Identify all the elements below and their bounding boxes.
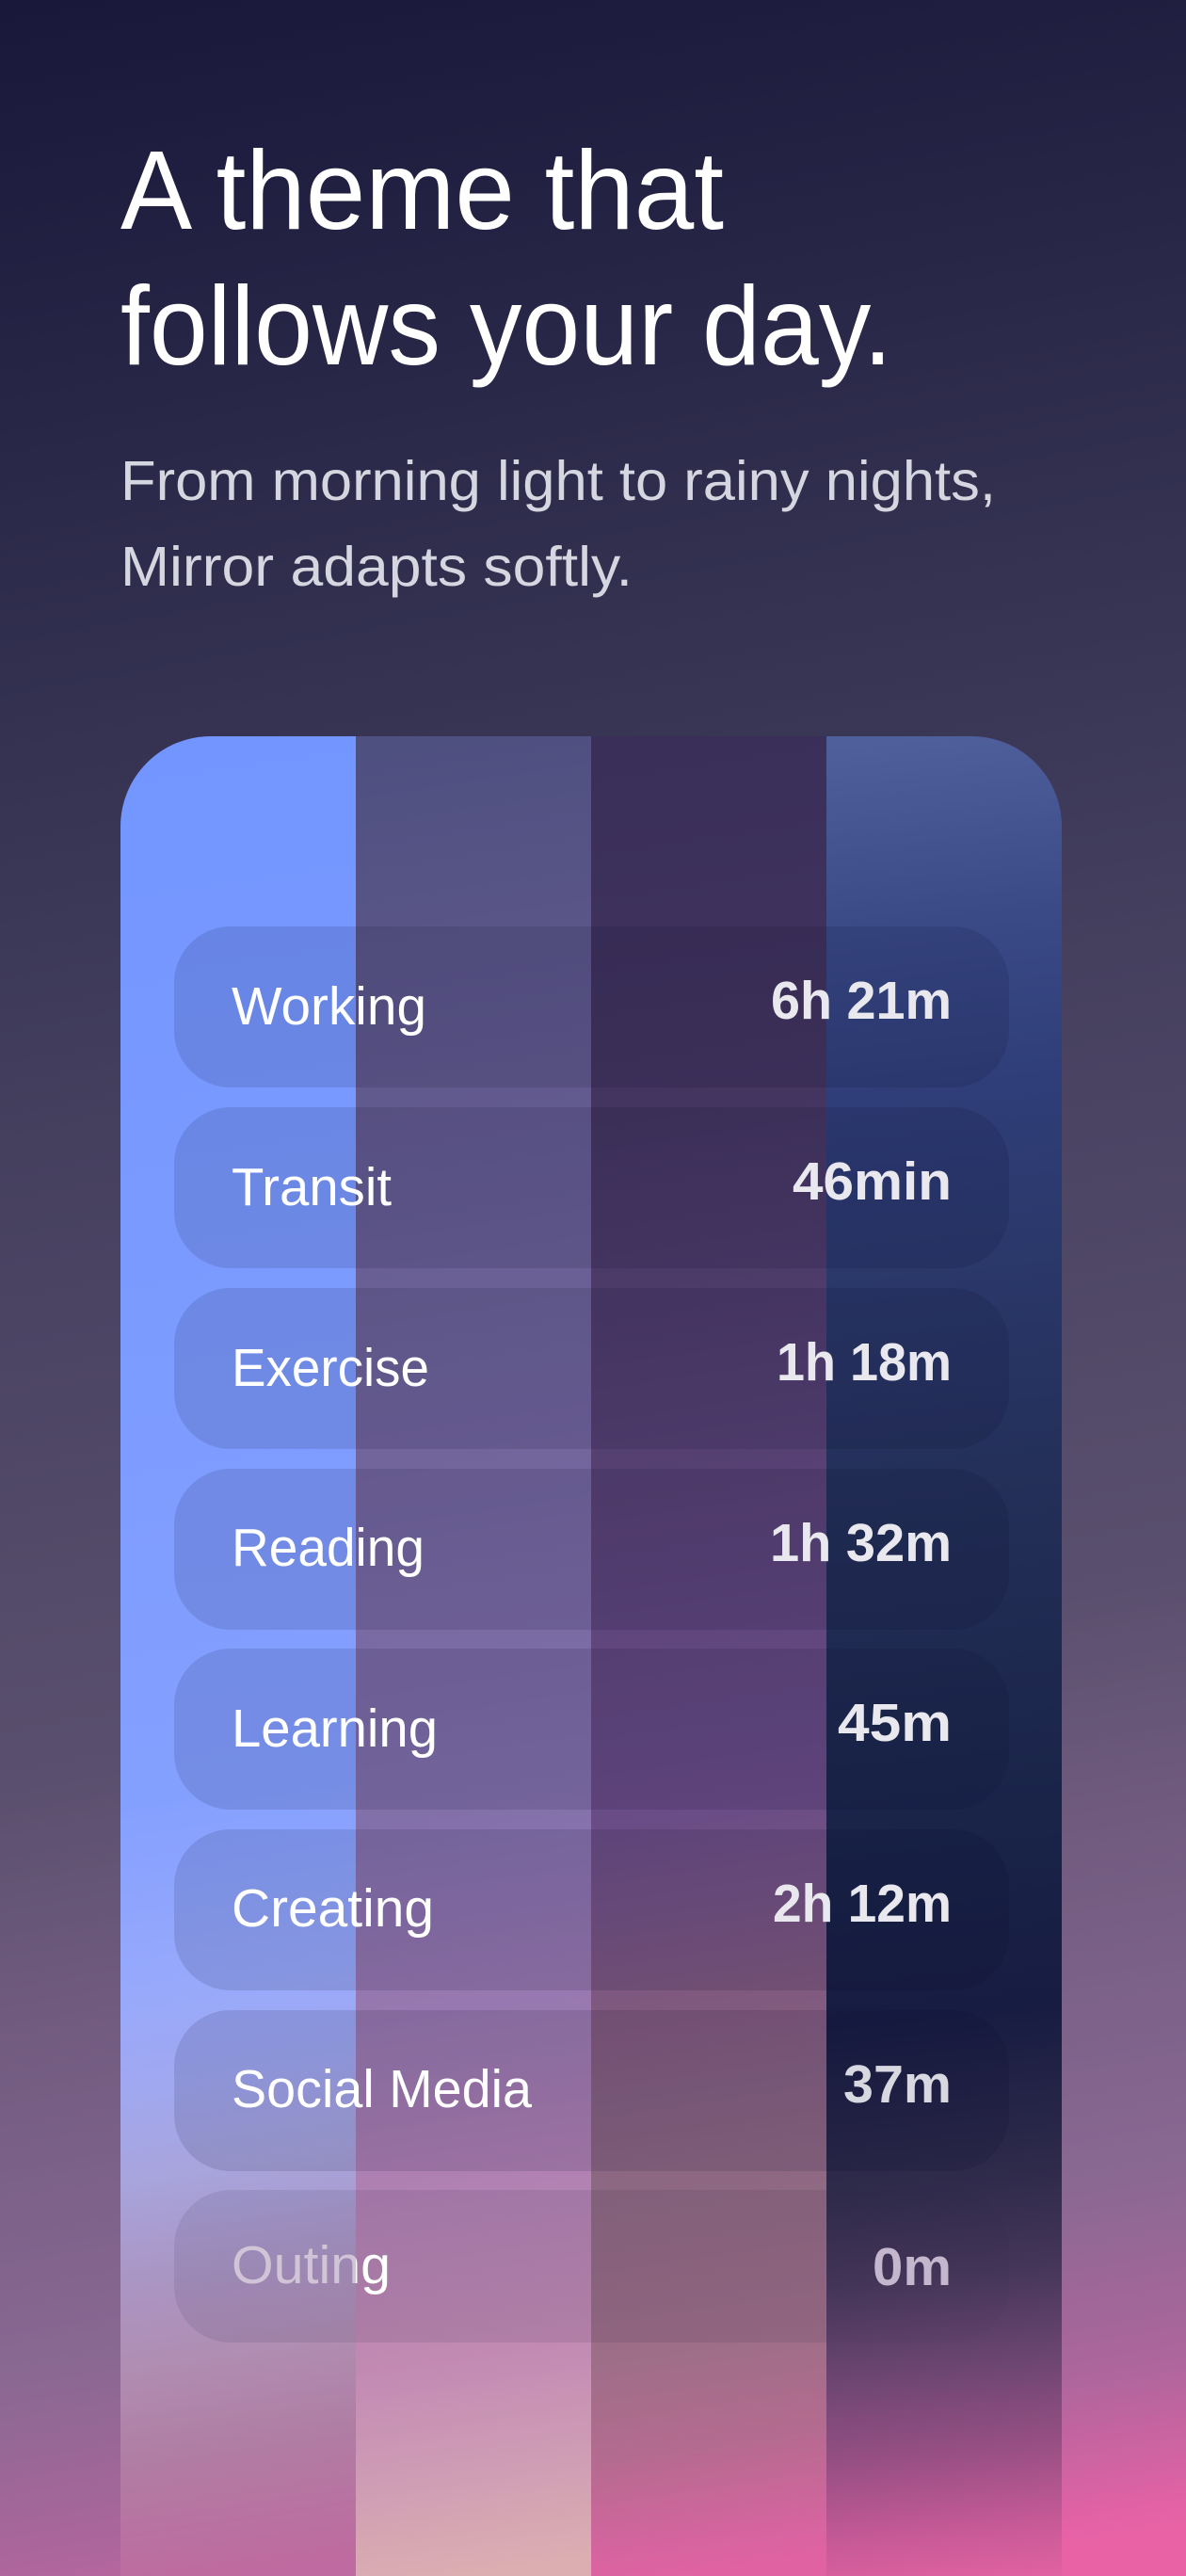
row: Transit: 46min <box>793 1151 952 1212</box>
column: morning blue <box>120 736 356 2576</box>
subtitle <box>120 450 996 598</box>
column: dusk violet <box>356 736 591 2576</box>
row: Outing: Outing <box>232 2235 391 2295</box>
row: Working: Working <box>232 976 426 1037</box>
row: Creating: 2h 12m <box>773 1874 952 1934</box>
row: Working <box>174 926 1009 1087</box>
row: Exercise: 1h 18m <box>777 1332 952 1393</box>
title <box>120 128 892 389</box>
row: Learning <box>174 1649 1009 1810</box>
row: Creating <box>174 1829 1009 1990</box>
row: Creating: Creating <box>232 1878 434 1939</box>
row: Learning: Learning <box>232 1699 438 1759</box>
title: follows your day. <box>120 264 892 389</box>
column: rainy night navy <box>826 736 1062 2576</box>
row: Social Media <box>174 2010 1009 2171</box>
row: Outing: Outing <box>232 2235 391 2295</box>
row: Transit <box>174 1107 1009 1268</box>
row: Working: 6h 21m <box>771 971 952 1031</box>
row: Outing <box>174 2190 1009 2343</box>
row: Reading: Reading <box>232 1518 425 1578</box>
row: Transit: Transit <box>232 1157 392 1217</box>
row: Exercise <box>174 1288 1009 1449</box>
row: Reading <box>174 1469 1009 1630</box>
panel: theme colour columns <box>120 736 1062 2576</box>
subtitle: Mirror adapts softly. <box>120 536 633 598</box>
row: Social Media: Social Media <box>232 2059 532 2119</box>
activity list <box>174 926 1009 2343</box>
row: Social Media: 37m <box>843 2054 952 2115</box>
row: Learning: 45m <box>838 1693 952 1753</box>
column: evening plum <box>591 736 826 2576</box>
row: Reading: 1h 32m <box>770 1513 952 1573</box>
row: Outing: 0m <box>873 2237 952 2297</box>
subtitle: From morning light to rainy nights, <box>120 450 996 512</box>
title: A theme that <box>120 128 724 253</box>
row: Exercise: Exercise <box>232 1338 429 1398</box>
